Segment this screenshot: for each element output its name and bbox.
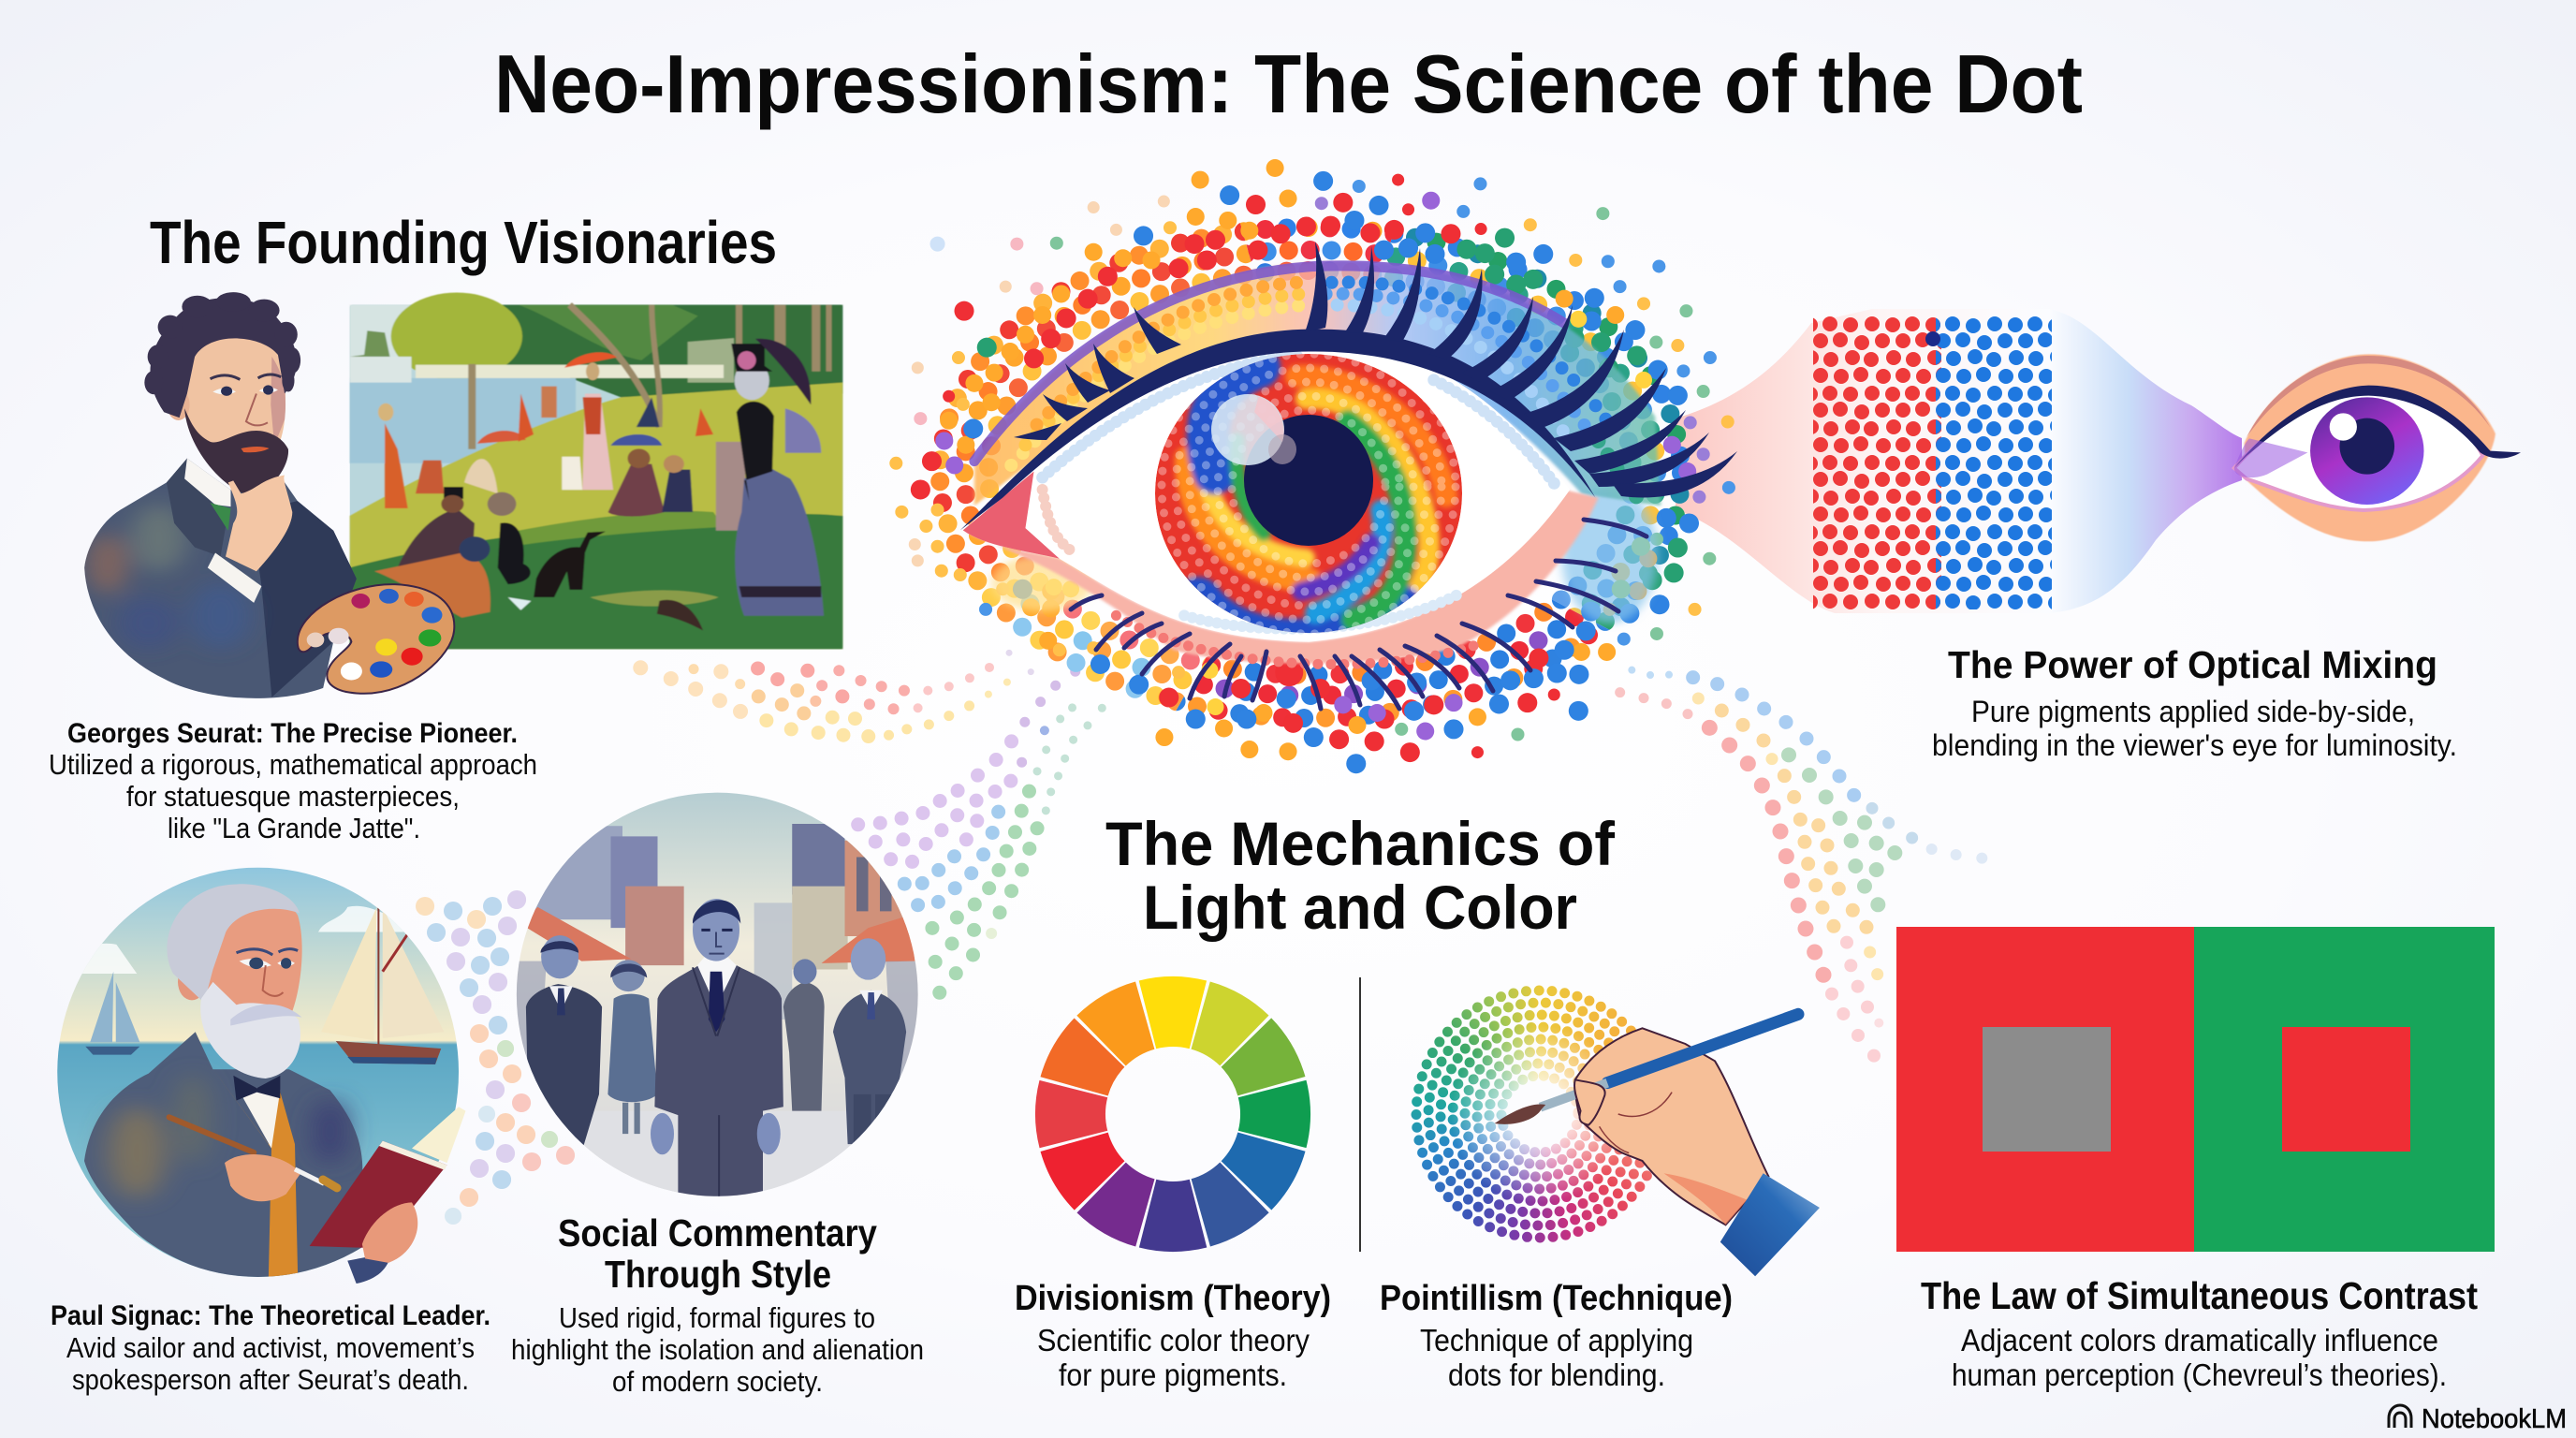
beam entering the eye [2234, 438, 2307, 477]
beard [200, 982, 300, 1078]
Signac caption [51, 1300, 490, 1396]
eyes [212, 388, 278, 394]
Seurat caption: like "La Grande Jatte". [168, 812, 420, 844]
left man [526, 935, 602, 1152]
contrast text: human perception (Chevreul’s theories). [1952, 1357, 2447, 1392]
head [208, 908, 302, 1011]
jacket [84, 459, 357, 698]
section heading: mechanics: Light and Color [1143, 873, 1577, 942]
contrast text [1921, 1274, 2478, 1392]
lower eyelashes [1071, 520, 1647, 709]
street [613, 1166, 822, 1193]
background figures [378, 352, 821, 517]
jacket colour blotches [87, 505, 251, 649]
pupil [1244, 415, 1373, 546]
iris swirl [1155, 354, 1462, 633]
buildings [534, 826, 622, 919]
standing foreground couple [716, 339, 824, 616]
brow arc [974, 266, 1564, 462]
social commentary text: of modern society. [612, 1365, 823, 1398]
mechanics captions [1015, 1279, 1733, 1392]
optical mixing text: blending in the viewer's eye for luminosity. [1932, 728, 2457, 762]
painting: La Grande Jatte [350, 293, 842, 649]
Signac caption: Paul Signac: The Theoretical Leader. [51, 1300, 490, 1331]
dotted trail: social circle to eye [858, 671, 1102, 992]
highlight [2330, 413, 2357, 441]
left sailboat [90, 972, 139, 1042]
red and blue dot field [1813, 315, 2052, 609]
tree trunks [472, 305, 828, 449]
social commentary text: highlight the isolation and alienation [511, 1333, 924, 1366]
finger lines [1600, 1093, 1672, 1153]
social commentary text: Social Commentary [558, 1211, 877, 1255]
right sailboat [321, 907, 376, 1040]
painting hand with brush [1495, 1014, 1820, 1276]
shirt collar and tie [184, 459, 230, 506]
central eye [896, 168, 1737, 764]
mechanics captions: dots for blending. [1448, 1357, 1665, 1392]
hand holding book [362, 1202, 417, 1263]
background tree canopy [410, 305, 842, 397]
portrait: Georges Seurat [84, 292, 454, 698]
white of the eye [963, 342, 1570, 642]
eyes [240, 959, 295, 968]
upper lid line [960, 330, 1595, 530]
central man [651, 899, 783, 1198]
mechanics captions: Technique of applying [1420, 1323, 1693, 1357]
hand [1575, 1028, 1768, 1225]
jacket lapel [167, 459, 226, 556]
optical mixing text: The Power of Optical Mixing [1948, 643, 2437, 686]
Signac caption: Avid sailor and activist, movement’s [66, 1331, 475, 1364]
right man [833, 938, 906, 1152]
simultaneous contrast panel [1896, 927, 2495, 1252]
thinking hand [226, 475, 292, 571]
brush [169, 1117, 254, 1152]
face [184, 332, 285, 472]
shirt and bow tie [243, 1088, 281, 1148]
section heading: mechanics: The Mechanics of [1105, 809, 1616, 878]
sclera shading [1043, 356, 1559, 629]
upper lid [2234, 386, 2521, 468]
sclera [2234, 389, 2482, 510]
mechanics captions: Divisionism (Theory) [1015, 1279, 1331, 1318]
lower left yellow haze [991, 554, 1093, 611]
waistcoat [220, 1078, 298, 1277]
lower right blue haze [1561, 486, 1658, 624]
thumb [1574, 1079, 1605, 1125]
contrast text: Adjacent colors dramatically influence [1961, 1323, 2438, 1357]
mouth [241, 447, 270, 452]
pointillist color disc [1409, 983, 1671, 1245]
jacket colour blotches [108, 1074, 346, 1198]
mechanics captions: Scientific color theory [1037, 1323, 1310, 1357]
social commentary text: Used rigid, formal figures to [559, 1301, 875, 1334]
scattered outer dots [896, 168, 1729, 764]
book [310, 1107, 466, 1248]
contrast text: The Law of Simultaneous Contrast [1921, 1274, 2478, 1317]
Seurat caption: for statuesque masterpieces, [126, 780, 460, 813]
small viewer eye [2234, 354, 2521, 541]
Seurat caption [49, 718, 537, 844]
optical mixing text [1932, 643, 2457, 762]
NotebookLM logo: NotebookLM [2422, 1404, 2567, 1434]
social commentary text: Through Style [605, 1253, 831, 1296]
woman [607, 960, 657, 1134]
sunlit grass [350, 383, 842, 649]
eyeshadow dots [1011, 283, 1644, 506]
side shade [517, 961, 918, 1091]
hand with brush [225, 1154, 300, 1201]
beard [184, 408, 288, 495]
foreground sitting figures and dog [374, 487, 703, 631]
palette [298, 584, 454, 694]
section heading: founding visionaries: The Founding Visionaries [150, 209, 777, 276]
social commentary text [511, 1211, 924, 1398]
optical mixing text: Pure pigments applied side-by-side, [1971, 695, 2415, 728]
curly hair [144, 292, 300, 418]
skin around the eye [2245, 354, 2496, 541]
lower rim dots [1116, 615, 1479, 665]
portrait: Paul Signac [55, 868, 466, 1284]
pupil [2340, 418, 2394, 475]
section heading: mechanics [1105, 809, 1616, 942]
mechanics captions: for pure pigments. [1059, 1357, 1287, 1392]
sleeve [1720, 1173, 1820, 1276]
shirt cuff [208, 553, 261, 603]
Signac caption: spokesperson after Seurat’s death. [72, 1363, 469, 1396]
dotted trail: top left to eye [640, 653, 1031, 737]
jacket [84, 1032, 363, 1277]
dotted trail: between circles [425, 900, 565, 1216]
iris highlight [1211, 394, 1296, 465]
back man [783, 959, 825, 1111]
upper eyelashes [1014, 242, 1737, 497]
dotted trail: eye to contrast panel [1620, 670, 1982, 1056]
tear duct [963, 471, 1060, 559]
eyeshadow band [974, 261, 1661, 506]
lower lid rim [963, 490, 1599, 664]
shaded grass [350, 514, 842, 649]
sleeve edge outside the circle [347, 1253, 391, 1284]
awnings [520, 907, 631, 961]
iris [2310, 397, 2423, 505]
optical mixing beam [1676, 309, 2242, 613]
title: Neo-Impressionism: The Science of the Dot [494, 37, 2083, 130]
color wheel [1028, 969, 1318, 1259]
Seurat caption: Utilized a rigorous, mathematical approach [49, 748, 537, 781]
Seurat caption: Georges Seurat: The Precise Pioneer. [67, 718, 518, 749]
hair [167, 884, 300, 1003]
social commentary scene [514, 790, 921, 1198]
dot halo around the eye [940, 227, 1681, 718]
brush [1607, 1014, 1798, 1083]
seascape [55, 868, 464, 1282]
mechanics captions: Pointillism (Technique) [1380, 1279, 1733, 1318]
